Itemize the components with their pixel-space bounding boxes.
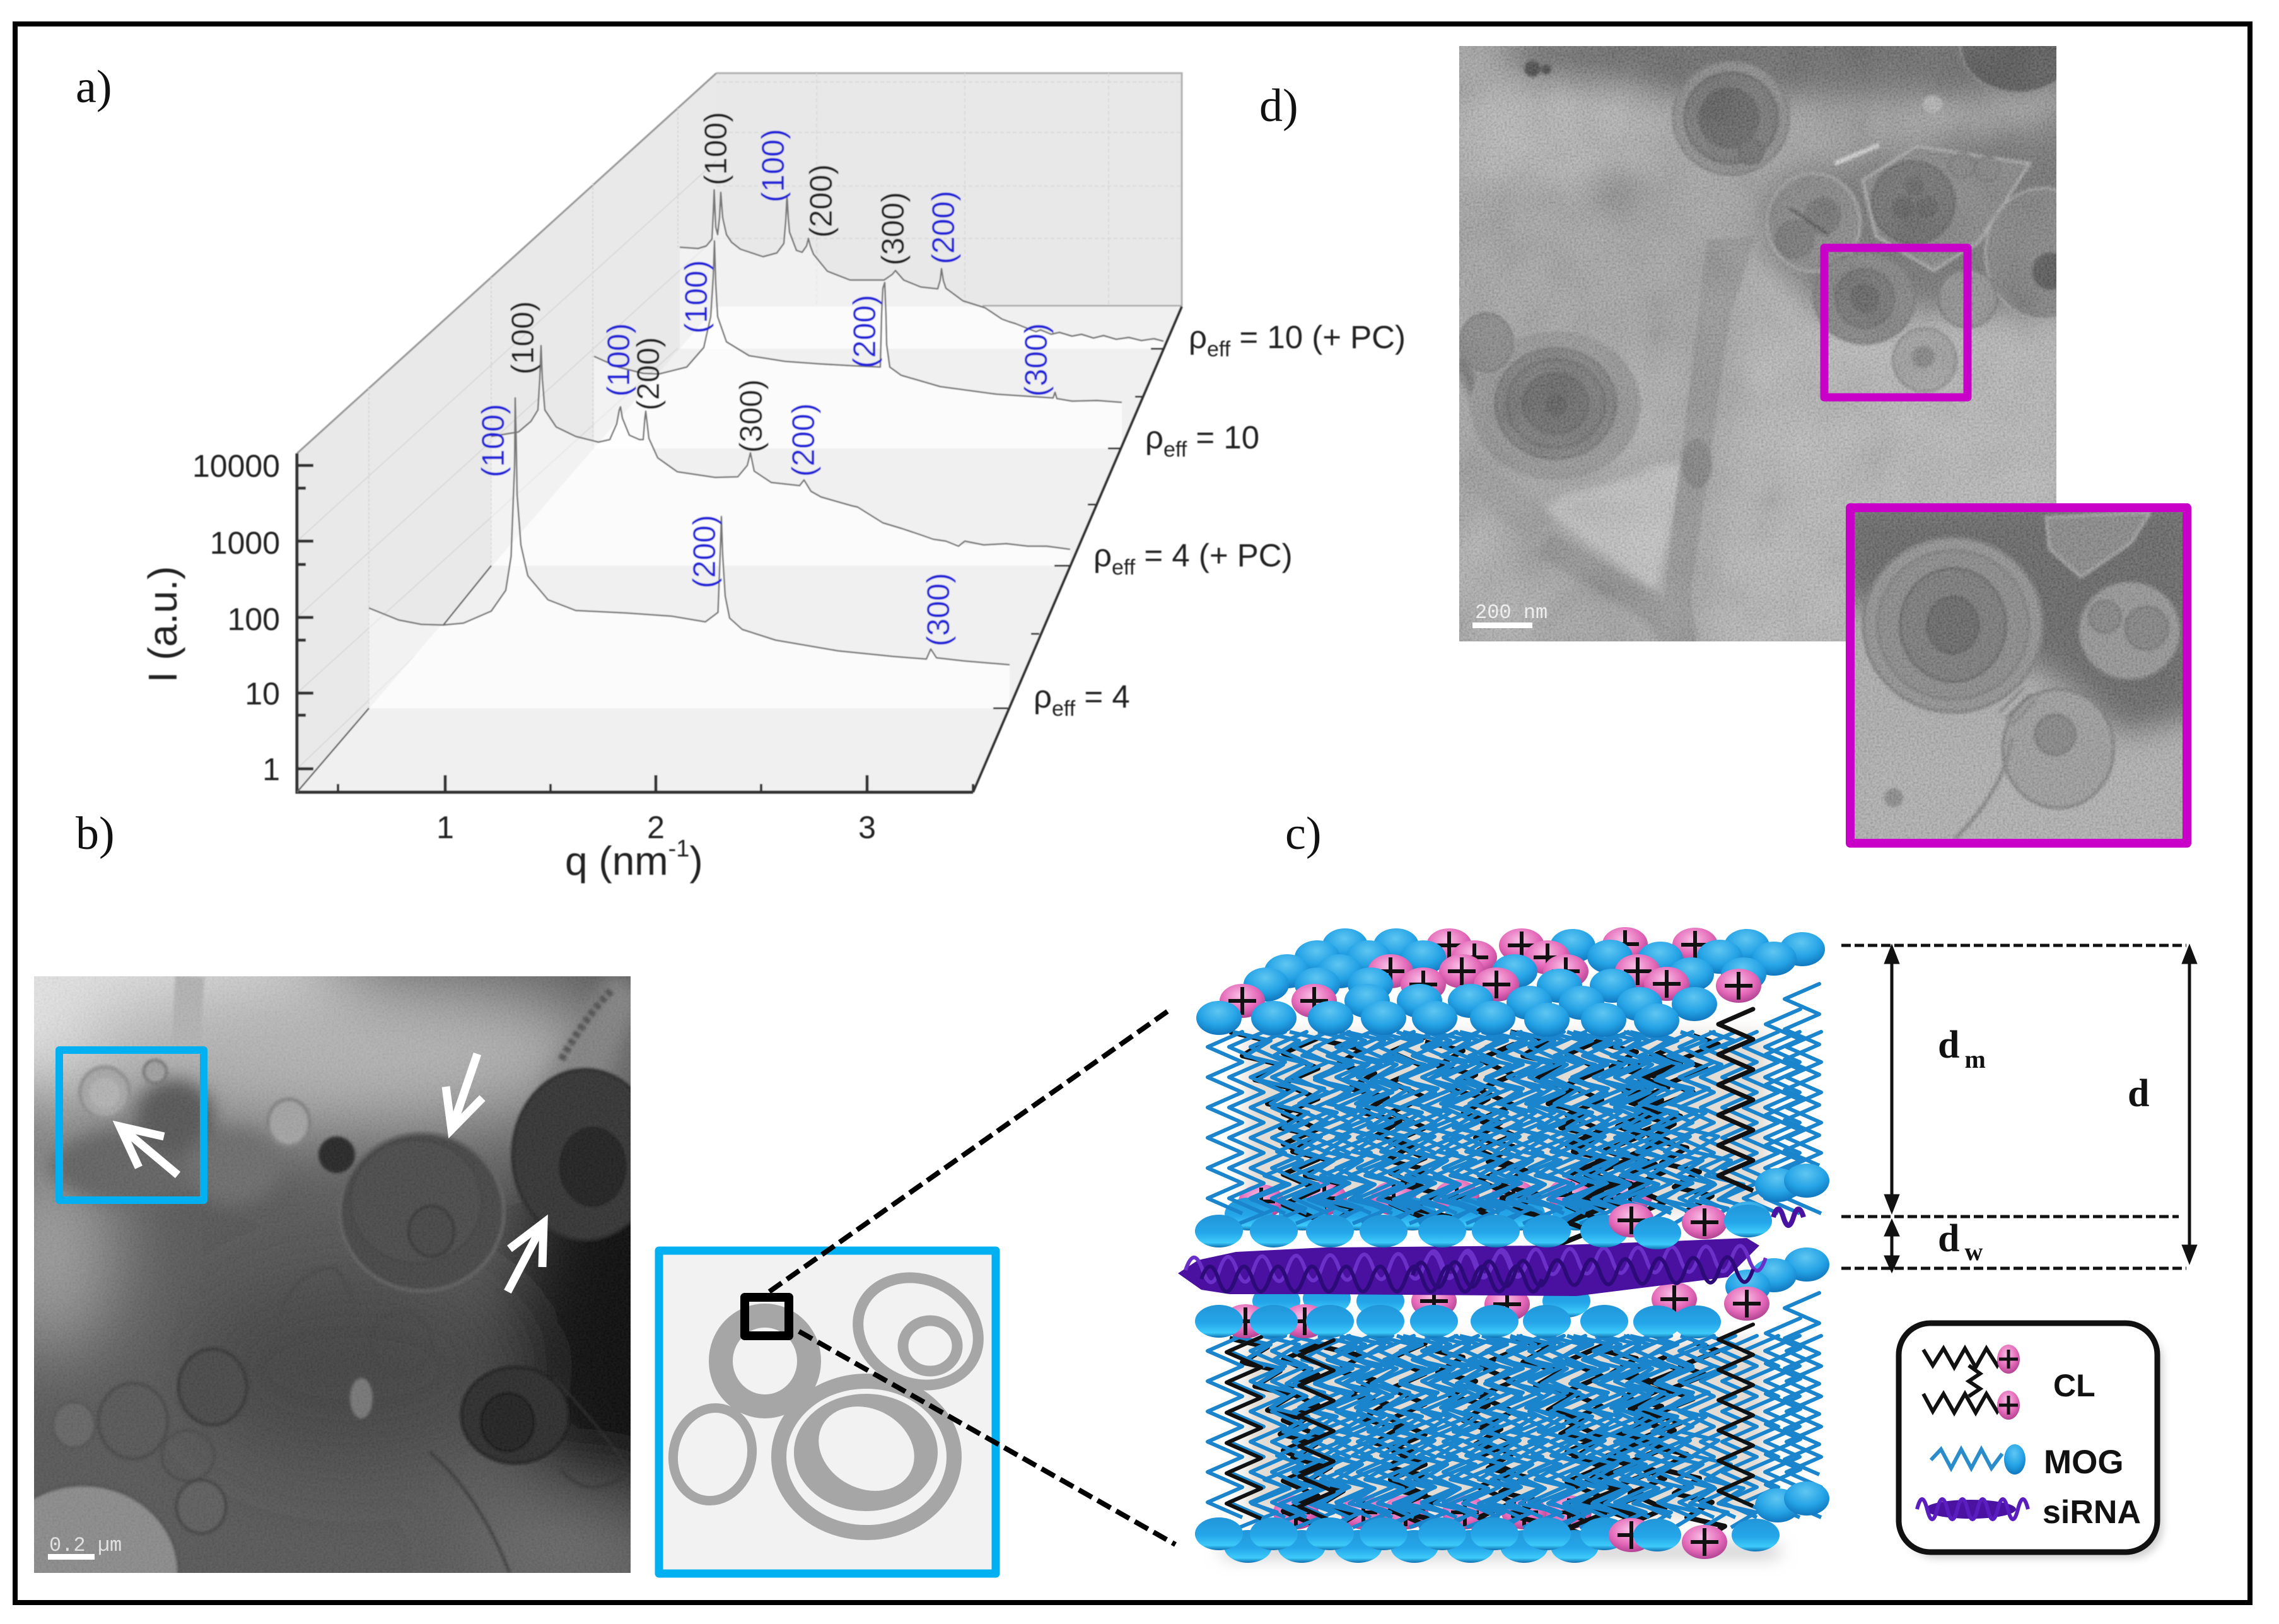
panel letter d: d)	[1259, 80, 1298, 132]
panel letter a: a)	[76, 61, 112, 113]
legend label: CL: CL	[2053, 1368, 2095, 1403]
x axis title: -1	[668, 836, 689, 862]
label d_w: w	[1964, 1237, 1983, 1266]
schematic of multilamellar vesicles	[659, 1251, 996, 1574]
back wall of the 3D plot	[297, 73, 1182, 769]
dimension arrow d_m	[1886, 948, 1897, 1210]
lower bilayer charged lipid tails	[1230, 1338, 1725, 1553]
dashed zoom line upper	[769, 1008, 1172, 1292]
arrow: white pointer at the central vesicle	[446, 1054, 482, 1130]
legend icon: CL	[1923, 1345, 2020, 1420]
blue selection box on panel b	[59, 1050, 204, 1200]
x axis tick labels: 2	[647, 810, 665, 845]
label d_w: d	[1938, 1217, 1959, 1260]
series labels: ρ	[1093, 537, 1112, 573]
upper bilayer buried charged heads	[1225, 1178, 1653, 1230]
upper bilayer headgroups, top leaflet	[1196, 927, 1825, 1037]
series labels: = 4	[1075, 679, 1130, 715]
black peak labels: (200)	[803, 164, 839, 238]
blue peak labels: (100)	[601, 323, 636, 397]
dimension arrow d	[2184, 948, 2195, 1261]
series labels: eff	[1052, 697, 1076, 721]
legend icon: siRNA	[1917, 1499, 2028, 1519]
blue peak labels: (100)	[755, 129, 791, 202]
blue peak labels: (200)	[687, 515, 722, 588]
series labels	[1034, 319, 1406, 721]
panel b: cryo-TEM micrograph	[0, 883, 731, 1624]
blue peak labels: (200)	[926, 190, 961, 264]
dimension arrow d_w	[1886, 1222, 1897, 1270]
black peak labels	[505, 112, 911, 453]
x axis tick labels	[436, 810, 876, 845]
upper bilayer foreground charged tail	[1718, 1009, 1753, 1191]
series labels: ρ	[1034, 679, 1052, 715]
series labels: eff	[1112, 556, 1136, 580]
lower bilayer lipid tails	[1208, 1293, 1821, 1528]
blue peak labels: (200)	[786, 403, 821, 477]
series labels: eff	[1163, 438, 1187, 462]
dashed zoom line lower	[799, 1331, 1175, 1545]
label d_m: d	[1938, 1024, 1959, 1066]
y axis tick labels: 1000	[210, 525, 280, 561]
scale bar: 0.2 µm: 0.2 µm	[49, 1534, 122, 1557]
blue peak labels: (100)	[679, 260, 714, 334]
arrow: white pointer at the right vesicle	[508, 1223, 544, 1292]
lower bilayer foreground charged tails	[1227, 1324, 1753, 1522]
black peak labels: (300)	[733, 379, 769, 453]
left wall of the 3D plot	[297, 73, 716, 792]
series labels: = 10	[1187, 419, 1259, 455]
black peak labels: (100)	[505, 301, 540, 375]
x axis tick labels: 3	[858, 810, 876, 845]
panel a: SAXS waterfall chart	[140, 73, 1406, 884]
blue peak labels: (100)	[475, 404, 511, 477]
axes and ticks	[297, 307, 1182, 792]
scale bar: 200 nm: 200 nm	[1475, 601, 1548, 624]
magenta selection box on panel d	[1824, 248, 1967, 397]
soft backdrop behind the lipid tails	[1223, 1034, 1778, 1555]
panel letter b: b)	[76, 808, 115, 860]
legend label: MOG: MOG	[2044, 1444, 2124, 1481]
legend label: siRNA: siRNA	[2043, 1494, 2141, 1531]
lower bilayer headgroups, front rows	[1195, 1304, 1721, 1338]
series labels: ρ	[1189, 319, 1207, 355]
upper bilayer charged lipid tails	[1230, 1032, 1725, 1246]
x axis tick labels: 1	[436, 810, 454, 845]
series labels: eff	[1207, 337, 1231, 361]
curve: rho eff 4 plus PC	[491, 346, 1070, 566]
x axis title: )	[689, 838, 703, 884]
curve: rho eff 4	[369, 398, 1010, 708]
y axis title: I (a.u.)	[140, 566, 185, 682]
series labels: = 10 (+ PC)	[1230, 319, 1406, 355]
legend icon: MOG	[1931, 1444, 2025, 1475]
upper bilayer headgroups, bottom leaflet	[1195, 1164, 1829, 1249]
blue peak labels: (300)	[921, 573, 956, 646]
series labels: ρ	[1145, 419, 1163, 455]
x axis title: q (nm	[565, 838, 668, 884]
panel d magnified inset	[1829, 492, 2207, 851]
blue peak labels	[475, 129, 1054, 646]
black peak labels: (100)	[698, 112, 733, 185]
label d: d	[2128, 1072, 2149, 1115]
vesicle rings in grey	[665, 1258, 996, 1533]
lower bilayer headgroups, back rows	[1252, 1247, 1829, 1321]
y axis tick labels: 1	[262, 752, 280, 787]
blue peak labels: (300)	[1018, 323, 1054, 397]
floor of the 3D plot	[297, 307, 1182, 792]
panel letter c: c)	[1285, 808, 1322, 860]
dimension guide lines	[1841, 945, 2186, 1268]
curve: rho eff 10	[594, 241, 1122, 448]
black zoom square	[745, 1297, 789, 1336]
y axis tick labels: 10	[245, 676, 280, 711]
y axis tick labels	[192, 448, 280, 787]
blue peak labels: (200)	[847, 295, 882, 368]
label d_m: m	[1964, 1045, 1986, 1073]
arrow: white pointer in the blue box	[120, 1126, 178, 1175]
y axis tick labels: 100	[228, 602, 280, 637]
black peak labels: (200)	[631, 337, 666, 411]
upper bilayer lipid tails	[1208, 984, 1821, 1224]
series labels: = 4 (+ PC)	[1135, 537, 1293, 573]
legend box	[1899, 1323, 2163, 1558]
y axis tick labels: 10000	[192, 448, 280, 484]
panel c: lamellar membrane model	[1178, 927, 1829, 1563]
curve: rho eff 10 plus PC	[680, 190, 1163, 349]
siRNA layer between bilayers	[1178, 1209, 1804, 1296]
lower bilayer headgroups, bottom leaflet	[1195, 1481, 1829, 1563]
black peak labels: (300)	[875, 192, 911, 266]
panel d: cryo-TEM micrograph	[1445, 2, 2157, 669]
lower bilayer buried charged heads	[1273, 1495, 1592, 1529]
